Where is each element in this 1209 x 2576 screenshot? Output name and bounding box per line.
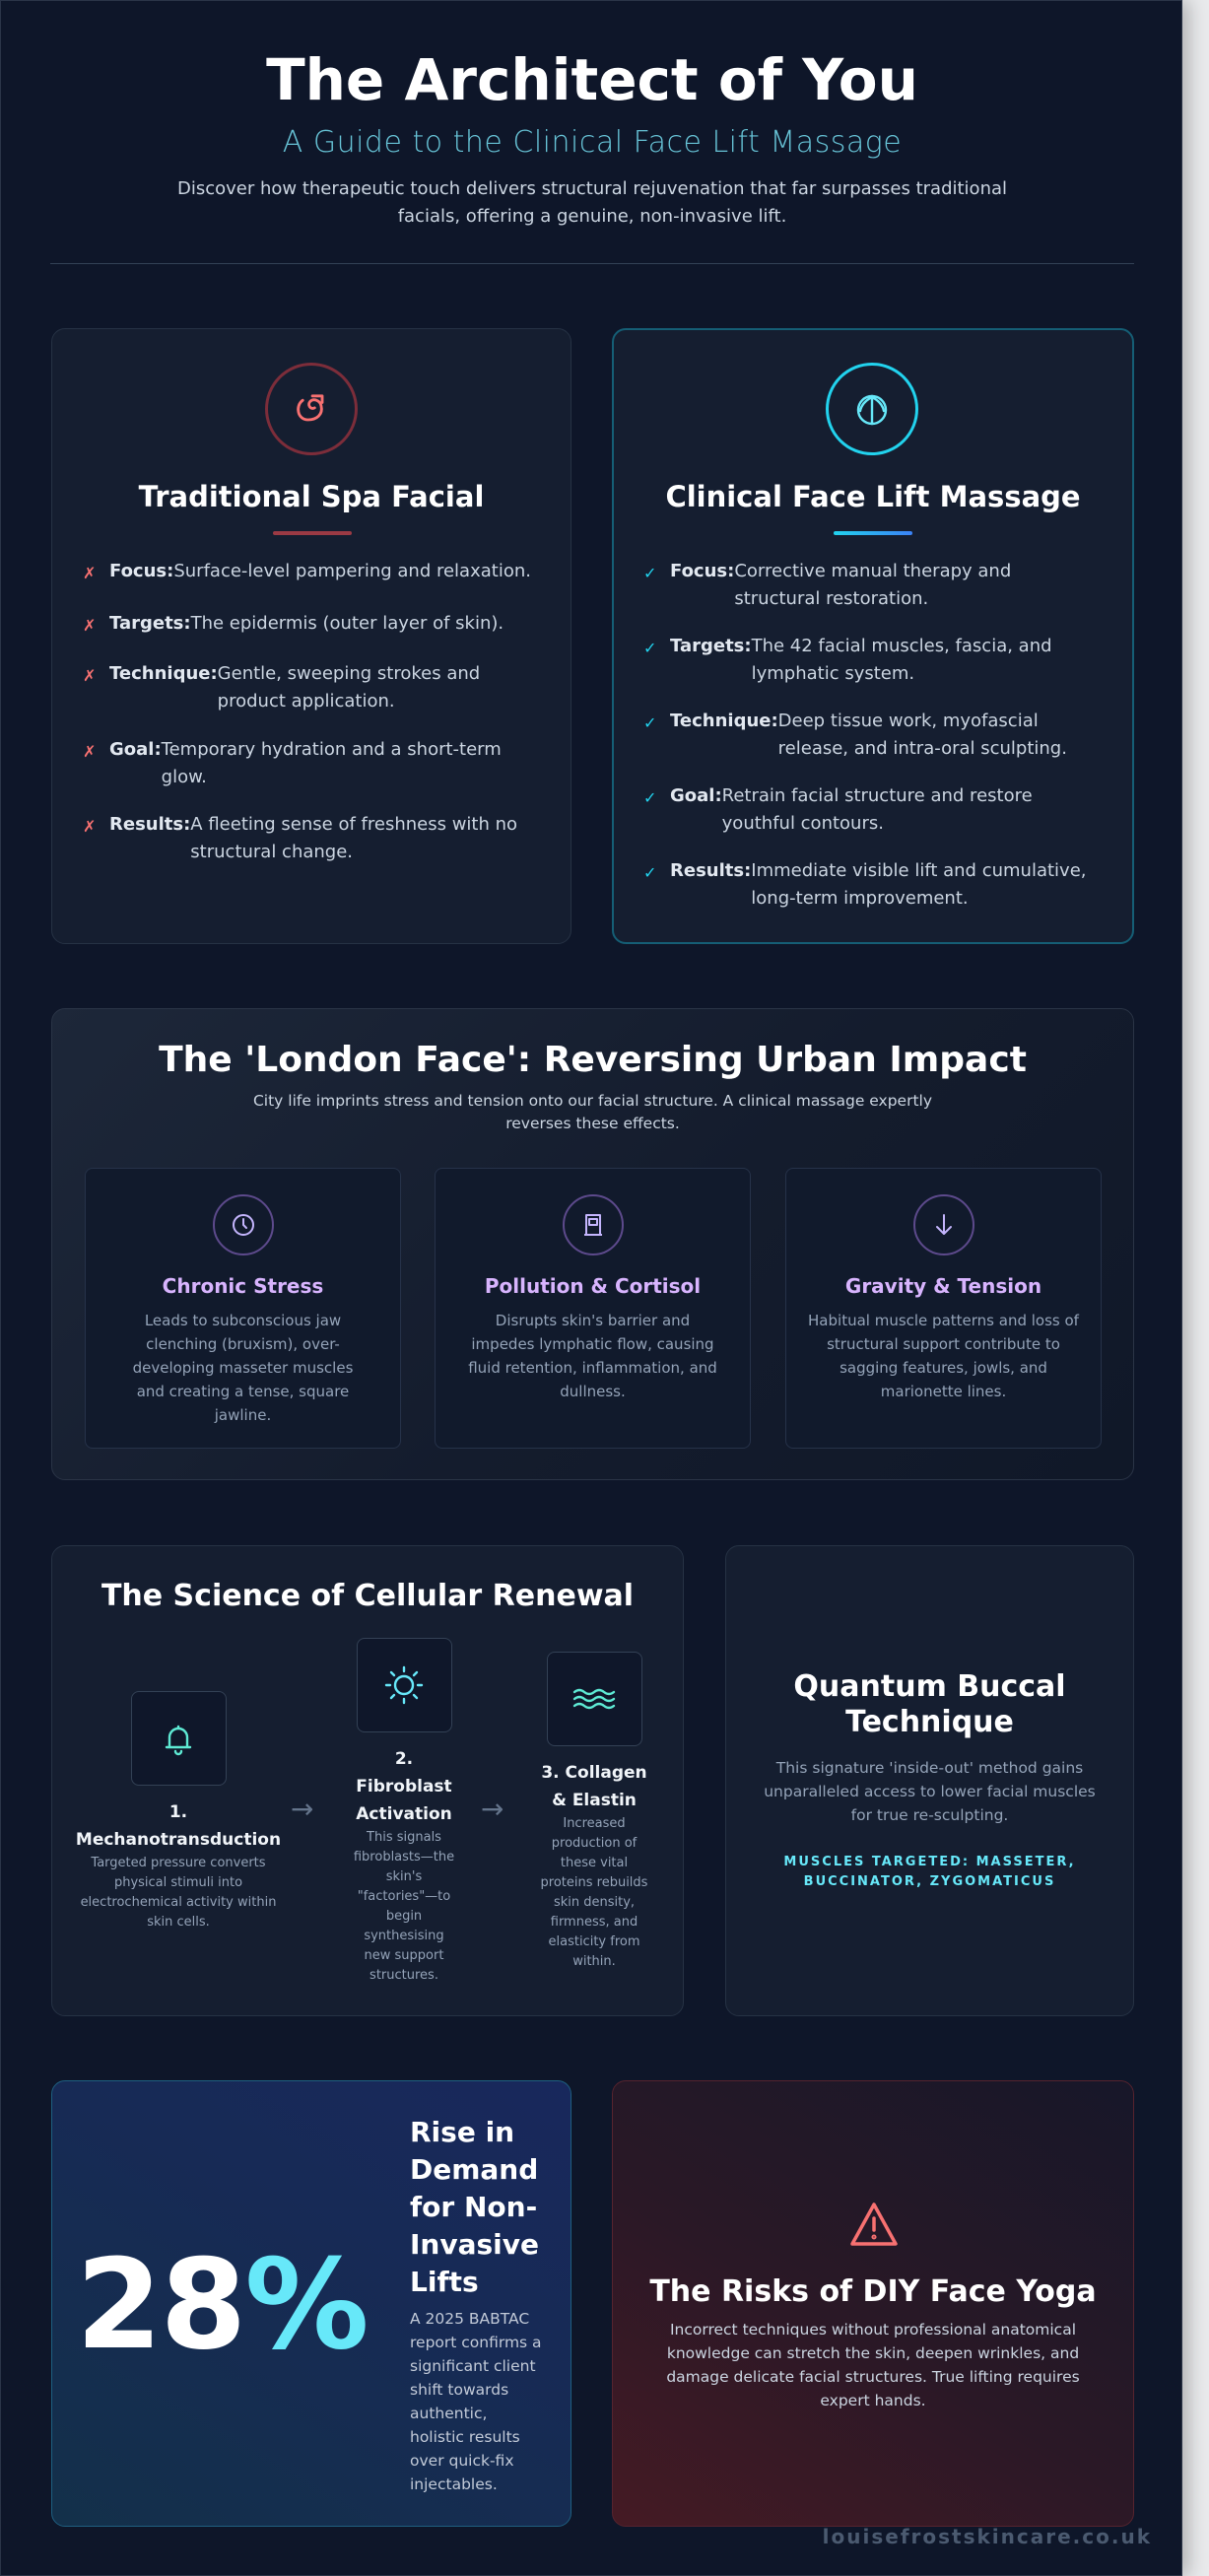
- list: spa facial points: Goal:: [109, 739, 162, 760]
- list: spa facial points: The epidermis (outer layer of skin).: [191, 613, 504, 634]
- step 3: Increased production of these vital proteins rebuilds skin density, firmness, and elasticity from within.: [541, 1816, 647, 1969]
- step 2: 2.: [395, 1749, 413, 1769]
- heading: Traditional Spa Facial: [139, 480, 484, 513]
- heading: Clinical Face Lift Massage: [665, 480, 1081, 513]
- card: pollution: Pollution & Cortisol: [485, 1274, 701, 1298]
- icon: down arrow: [913, 1194, 974, 1255]
- step 3: [541, 1652, 647, 1969]
- icon: sun: [357, 1638, 451, 1732]
- stat description: A 2025 BABTAC report confirms a significant client shift towards authentic, holistic results over quick-fix injectables.: [410, 2310, 542, 2493]
- panel: science of cellular renewal: [51, 1545, 684, 2016]
- heading: The Risks of DIY Face Yoga: [649, 2274, 1097, 2309]
- intro: City life imprints stress and tension onto our facial structure. A clinical massage expertly reverses these effects.: [253, 1092, 932, 1132]
- card: gravity: Habitual muscle patterns and loss of structural support contribute to sagging features, jowls, and marionette lines.: [808, 1312, 1079, 1400]
- panel: quantum buccal technique: [725, 1545, 1134, 2016]
- list: clinical points: [643, 561, 1086, 909]
- list: spa facial points: Temporary hydration and a short-term glow.: [162, 739, 502, 787]
- card: gravity: [785, 1168, 1102, 1449]
- list: spa facial points: ✗: [83, 616, 96, 635]
- step 1: Targeted pressure converts physical stimuli into electrochemical activity within skin cells.: [81, 1856, 276, 1930]
- list: clinical points: ✓: [643, 713, 656, 732]
- list: clinical points: Retrain facial structure and restore youthful contours.: [722, 785, 1033, 834]
- list: spa facial points: ✗: [83, 817, 96, 836]
- list: clinical points: Focus:: [670, 561, 734, 581]
- list: clinical points: Immediate visible lift and cumulative, long-term improvement.: [751, 860, 1086, 909]
- list: clinical points: Deep tissue work, myofascial release, and intra-oral sculpting.: [778, 711, 1067, 759]
- muscles targeted: MUSCLES TARGETED: MASSETER, BUCCINATOR, ZYGOMATICUS: [783, 1855, 1076, 1889]
- list: clinical points: Targets:: [670, 636, 752, 656]
- icon: clock: [213, 1194, 274, 1255]
- card: gravity: Gravity & Tension: [845, 1274, 1041, 1298]
- step 2: [354, 1638, 454, 1983]
- list: clinical points: ✓: [643, 639, 656, 657]
- step 2: Fibroblast Activation: [356, 1777, 452, 1824]
- card: chronic stress: Chronic Stress: [163, 1274, 323, 1298]
- big number: 28%: [76, 2232, 368, 2377]
- panel: 28% statistic: [51, 2080, 571, 2527]
- list: spa facial points: Gentle, sweeping strokes and product application.: [218, 663, 480, 712]
- title: The Architect of You: [266, 46, 918, 113]
- list: spa facial points: [83, 561, 531, 862]
- list: spa facial points: ✗: [83, 742, 96, 761]
- list: spa facial points: Focus:: [109, 561, 173, 581]
- list: spa facial points: Technique:: [109, 663, 218, 684]
- list: clinical points: Corrective manual therapy and structural restoration.: [734, 561, 1011, 609]
- icon: building: [563, 1194, 624, 1255]
- list: spa facial points: Surface-level pampering and relaxation.: [173, 561, 531, 581]
- list: spa facial points: A fleeting sense of freshness with no structural change.: [190, 814, 517, 862]
- card: pollution: Disrupts skin's barrier and impedes lymphatic flow, causing fluid retention, inflammation, and dullness.: [468, 1312, 717, 1400]
- list: clinical points: Goal:: [670, 785, 722, 806]
- panel: london face: [51, 1008, 1134, 1480]
- step 1: Mechanotransduction: [76, 1830, 281, 1850]
- heading: Technique: [845, 1705, 1014, 1739]
- arrow: step 1 to 2: →: [291, 1793, 313, 1825]
- list: clinical points: The 42 facial muscles, fascia, and lymphatic system.: [752, 636, 1052, 684]
- icon: spa swirl: [265, 363, 358, 455]
- icon: warning: [850, 2203, 898, 2246]
- list: clinical points: ✓: [643, 788, 656, 807]
- step 3: 3. Collagen & Elastin: [541, 1763, 647, 1810]
- heading: The Science of Cellular Renewal: [101, 1579, 634, 1613]
- icon: waves: [546, 1652, 642, 1746]
- subtitle: A Guide to the Clinical Face Lift Massage: [283, 125, 902, 160]
- icon: clinical: [826, 363, 918, 455]
- list: clinical points: ✓: [643, 564, 656, 582]
- card: pollution: [435, 1168, 751, 1449]
- intro text: Discover how therapeutic touch delivers structural rejuvenation that far surpasses traditional facials, offering a genuine, non-invasive lift.: [177, 178, 1007, 227]
- list: clinical points: ✓: [643, 863, 656, 882]
- step 2: This signals fibroblasts—the skin's "factories"—to begin synthesising new support structures.: [354, 1830, 454, 1983]
- list: clinical points: Results:: [670, 860, 751, 881]
- footer: website: louisefrostskincare.co.uk: [823, 2525, 1152, 2548]
- card: chronic stress: Leads to subconscious jaw clenching (bruxism), over-developing masseter muscles and creating a tense, square jawline.: [133, 1312, 353, 1424]
- heading: Quantum Buccal: [793, 1669, 1066, 1704]
- panel: traditional spa facial: [51, 328, 571, 944]
- list: spa facial points: Targets:: [109, 613, 191, 634]
- panel: clinical face lift massage: [612, 328, 1134, 944]
- list: clinical points: Technique:: [670, 711, 778, 731]
- heading: [793, 1669, 1066, 1739]
- list: spa facial points: Results:: [109, 814, 190, 835]
- description: This signature 'inside-out' method gains unparalleled access to lower facial muscles for true re-sculpting.: [764, 1759, 1096, 1824]
- list: spa facial points: ✗: [83, 564, 96, 582]
- list: spa facial points: ✗: [83, 666, 96, 685]
- step 1: 1.: [169, 1802, 187, 1822]
- stat heading: Rise in Demand for Non-Invasive Lifts: [410, 2116, 539, 2298]
- card: chronic stress: [85, 1168, 401, 1449]
- heading: The 'London Face': Reversing Urban Impact: [159, 1040, 1027, 1080]
- arrow: step 2 to 3: →: [481, 1793, 504, 1825]
- description: Incorrect techniques without professional anatomical knowledge can stretch the skin, deepen wrinkles, and damage delicate facial structures. True lifting requires expert hands.: [666, 2321, 1080, 2409]
- panel: risks of diy face yoga: [612, 2080, 1134, 2527]
- icon: bell: [130, 1691, 227, 1786]
- step 1: [76, 1691, 281, 1930]
